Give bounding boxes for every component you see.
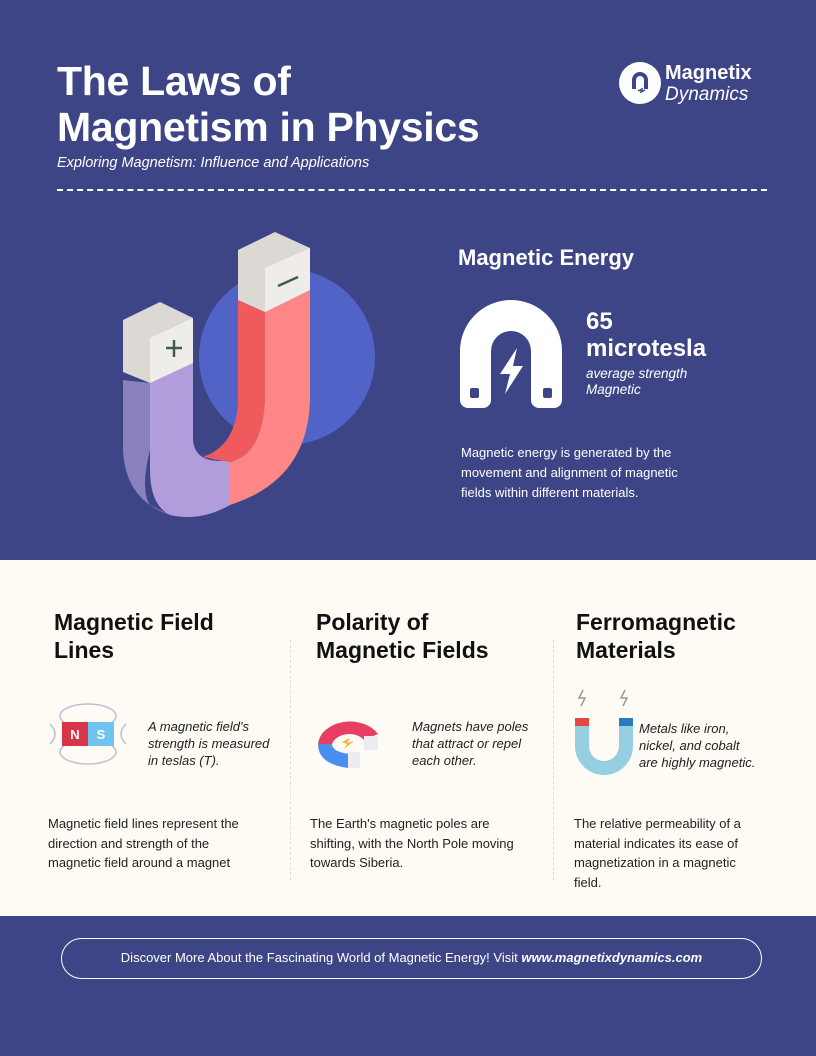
panel: polarity (310, 609, 528, 870)
text body: Magnetic field lines represent the direction and strength of the magnetic field around a magnet (48, 816, 239, 870)
icon: blue magnet (575, 690, 633, 775)
icon: NS magnet: N (70, 727, 80, 742)
stat: average strength (586, 366, 687, 381)
stat: microtesla (586, 335, 706, 362)
heading: Magnetic Field (54, 609, 214, 635)
icon: logo magnet (619, 62, 661, 104)
text body: The relative permeability of a material indicates its ease of magnetization in a magnetic field. (574, 816, 741, 890)
heading (316, 609, 489, 663)
heading: Lines (54, 637, 114, 663)
icon: white magnet (460, 300, 562, 408)
divider dashed (57, 189, 767, 191)
logo: Magnetix (665, 62, 752, 84)
title: The Laws of (57, 58, 291, 104)
illustration: magnet (123, 232, 375, 517)
stat (586, 308, 706, 397)
stat: Magnetic (586, 382, 641, 397)
heading: Magnetic Fields (316, 637, 489, 663)
heading: Materials (576, 637, 676, 663)
logo (619, 62, 752, 105)
icon: colored magnet (318, 722, 378, 768)
panel: field lines (48, 609, 270, 870)
text italic: Metals like iron, nickel, and cobalt are highly magnetic. (639, 721, 755, 770)
heading: Magnetic Energy: Magnetic Energy (458, 245, 634, 270)
title (57, 58, 479, 150)
stat: 65 (586, 308, 613, 335)
icon: NS magnet (50, 703, 126, 765)
heading (54, 609, 214, 663)
icon: NS magnet: S (97, 727, 106, 742)
panel: cream (0, 560, 816, 916)
text italic: Magnets have poles that attract or repel each other. (412, 719, 528, 768)
heading: Ferromagnetic (576, 609, 736, 635)
title: Magnetism in Physics (57, 104, 479, 150)
text body: The Earth's magnetic poles are shifting, with the North Pole moving towards Siberia. (310, 816, 514, 870)
text italic: A magnetic field's strength is measured in teslas (T). (148, 719, 269, 768)
footer CTA: Discover More About the Fascinating World of Magnetic Energy! Visit www.magnetixdynamics.com (121, 950, 702, 965)
subtitle: Exploring Magnetism: Influence and Applications (57, 155, 369, 171)
logo: Dynamics (665, 84, 748, 105)
heading (576, 609, 736, 663)
heading: Polarity of (316, 609, 428, 635)
panel: ferromagnetic (574, 609, 755, 890)
footer CTA (61, 938, 762, 979)
text: energy description: Magnetic energy is generated by the movement and alignment of magnetic fields within different materials. (461, 445, 678, 500)
